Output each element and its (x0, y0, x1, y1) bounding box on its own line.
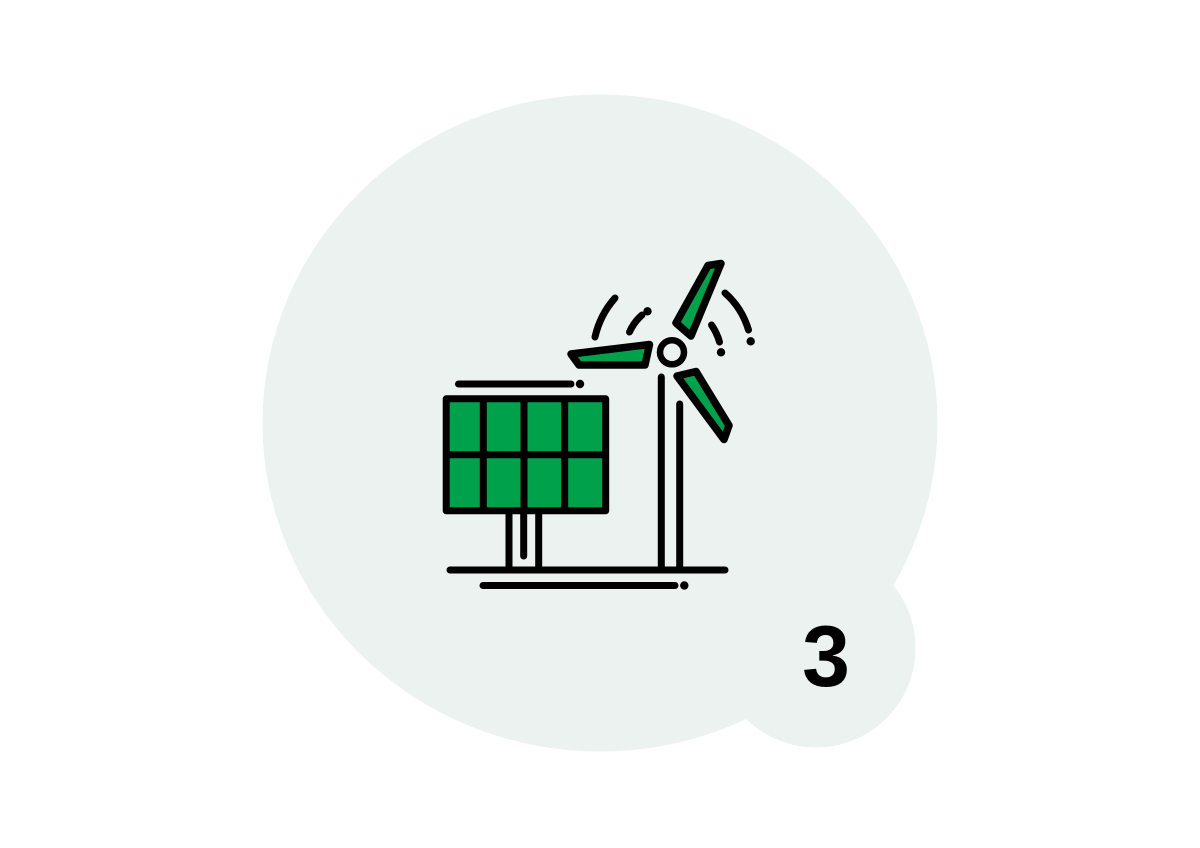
icon: solar panel (446, 399, 606, 570)
ground lines (450, 570, 725, 590)
wind turbine (571, 264, 729, 570)
background blob: large circle with number bubble (262, 94, 938, 752)
icon: solar panel and wind turbine (446, 264, 755, 590)
turbine blade: left (571, 344, 650, 365)
wind motion arcs (595, 293, 755, 356)
turbine tower (661, 377, 680, 570)
number 3: 3 (802, 609, 850, 705)
turbine hub (660, 340, 684, 364)
turbine blade: top (676, 264, 721, 336)
sun line above the panel (458, 380, 584, 388)
turbine blade: lower right (677, 372, 729, 440)
